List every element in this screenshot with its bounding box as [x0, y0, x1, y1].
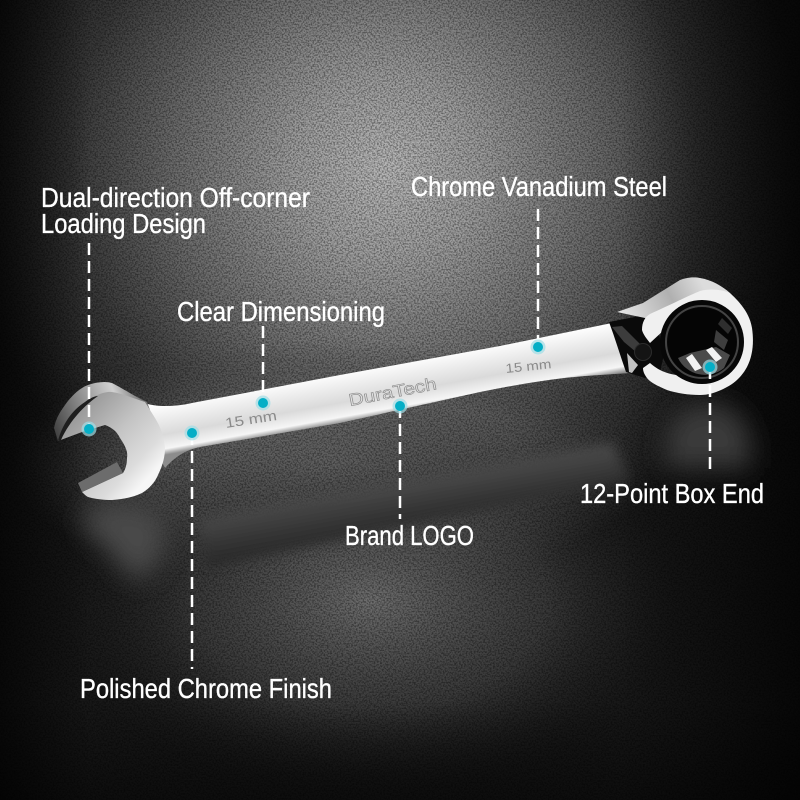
dashed leader — [537, 209, 539, 340]
wrench: jaw groove — [58, 396, 98, 441]
engraving: 15 mm on open end side: 15 mm — [224, 407, 278, 431]
callout: chrome vanadium steel — [411, 171, 667, 354]
dashed leader — [709, 367, 711, 472]
label: Clear Dimensioning — [177, 296, 385, 327]
marker dot — [184, 426, 200, 440]
wrench — [54, 277, 753, 500]
wrench: ring head outer body — [617, 277, 730, 330]
callout: 12-point box end — [580, 360, 764, 509]
wrench: lower jaw inner face — [78, 462, 123, 492]
wrench: grey inner ring — [666, 306, 738, 378]
wrench: open end face — [58, 392, 165, 500]
label: Polished Chrome Finish — [80, 673, 332, 704]
wrench: open end upper rim — [54, 382, 150, 441]
marker dot — [530, 340, 546, 354]
marker dot — [702, 360, 718, 374]
marker dot — [82, 422, 96, 436]
marker dot — [392, 398, 408, 414]
reflection: ring end — [664, 403, 751, 468]
engraving: 15 mm on ring end side: 15 mm — [505, 356, 552, 376]
callout: brand logo — [345, 398, 474, 551]
label: Dual-direction Off-corner — [41, 182, 310, 213]
label: 12-Point Box End — [580, 478, 764, 509]
wrench: ratchet mechanism dark section — [609, 314, 665, 378]
wrench: polished ring crescent — [642, 290, 753, 395]
label: Brand LOGO — [345, 520, 474, 551]
dashed leader — [88, 243, 90, 429]
marker dot — [256, 396, 270, 410]
label: Chrome Vanadium Steel — [411, 171, 667, 202]
wrench reflection on floor — [83, 403, 751, 580]
dashed leader — [262, 326, 264, 396]
reflection: open end — [83, 501, 167, 580]
label — [41, 182, 310, 239]
wrench: pawl lever — [612, 326, 652, 373]
wrench: black ratchet ring — [660, 300, 744, 384]
callout: clear dimensioning — [177, 296, 385, 410]
wrench: handle — [145, 323, 630, 468]
dashed leader — [399, 406, 401, 519]
callout: polished chrome finish — [80, 426, 332, 704]
dashed leader — [191, 433, 193, 669]
label: Loading Design — [41, 208, 206, 239]
callout: dual-direction off-corner loading — [41, 182, 310, 436]
engraving: DuraTech brand logo: DuraTech — [347, 374, 438, 410]
wrench: 12-point box opening — [668, 308, 736, 376]
reflection: handle band — [199, 443, 630, 568]
